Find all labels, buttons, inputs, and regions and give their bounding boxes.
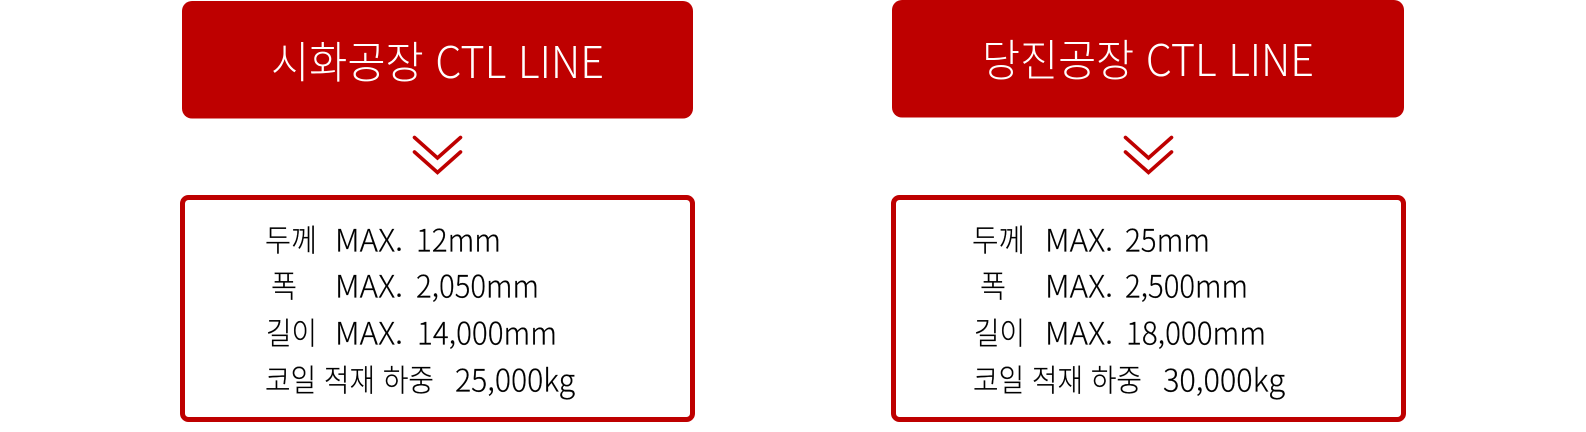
spec: length: MAX.	[1045, 308, 1113, 354]
spec: thickness: 두께	[265, 216, 317, 260]
spec: width: MAX.	[1045, 262, 1113, 306]
spec: width: 2,050mm	[416, 262, 539, 306]
arrow: double chevron	[414, 138, 460, 172]
spec: thickness: 두께	[972, 216, 1025, 260]
spec: coil load	[973, 356, 1285, 400]
spec: length: 길이	[266, 308, 317, 354]
panel: Siheung CTL line	[182, 1, 693, 420]
heading: Siheung factory	[182, 1, 693, 118]
heading: Siheung factory: 시화공장 CTL LINE	[271, 27, 604, 91]
spec: thickness	[972, 216, 1210, 260]
spec: length: 14,000mm	[417, 308, 557, 354]
heading: Dangjin factory	[892, 0, 1404, 118]
spec box	[894, 198, 1404, 420]
spec: width: 폭	[980, 262, 1006, 306]
spec: coil load	[265, 356, 575, 400]
panel: Dangjin CTL line	[892, 0, 1404, 420]
spec: thickness: MAX.	[335, 216, 403, 260]
spec: width: 2,500mm	[1125, 262, 1248, 306]
spec: width	[980, 262, 1248, 306]
spec: thickness: 12mm	[416, 216, 501, 260]
spec box	[182, 198, 692, 420]
arrow: double chevron	[1126, 138, 1172, 172]
spec: thickness: MAX.	[1045, 216, 1113, 260]
spec: coil load: 코일 적재 하중	[265, 356, 434, 400]
spec: coil load: 코일 적재 하중	[973, 356, 1142, 400]
spec: width: 폭	[271, 262, 297, 306]
heading: Dangjin factory: 당진공장 CTL LINE	[982, 25, 1314, 89]
spec: length: MAX.	[335, 308, 403, 354]
spec: width: MAX.	[335, 262, 403, 306]
spec: length	[266, 308, 557, 354]
spec: coil load: 25,000kg	[455, 356, 575, 400]
spec: length: 18,000mm	[1126, 308, 1266, 354]
spec: width	[271, 262, 539, 306]
spec: coil load: 30,000kg	[1163, 356, 1285, 400]
spec: thickness: 25mm	[1125, 216, 1210, 260]
spec: length	[974, 308, 1266, 354]
spec: length: 길이	[974, 308, 1025, 354]
spec: thickness	[265, 216, 501, 260]
